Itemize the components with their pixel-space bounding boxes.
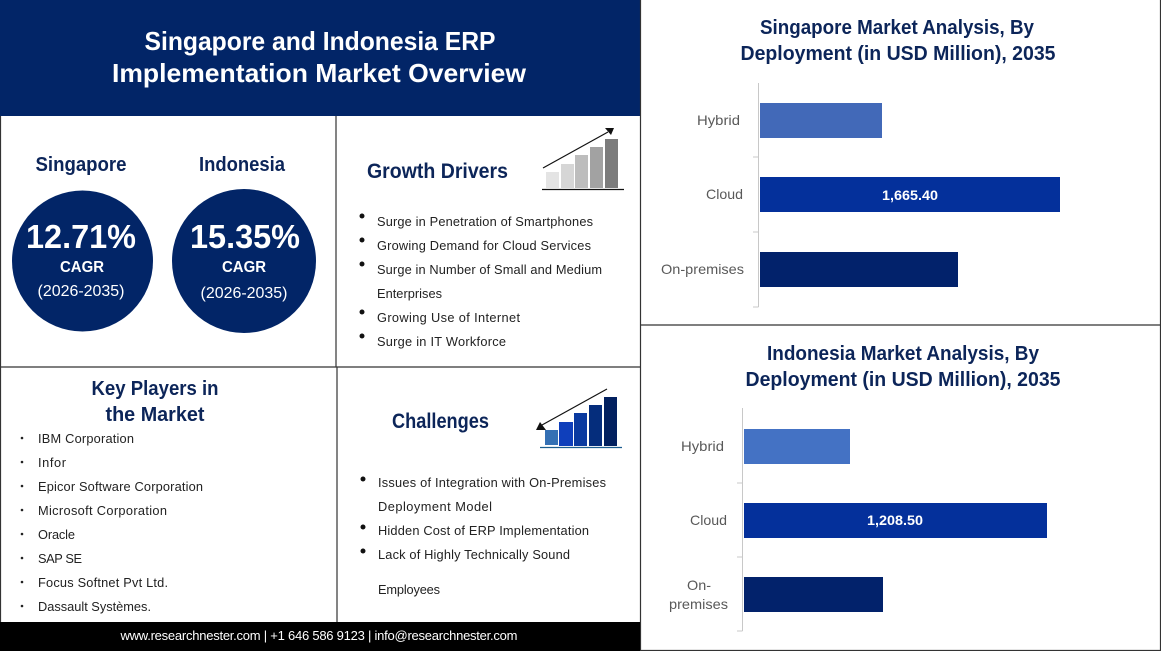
title banner: Implementation Market Overview — [112, 58, 527, 88]
list: challenges: Employees — [378, 582, 440, 597]
bar: On-premises — [669, 577, 883, 612]
list: growth drivers: Surge in IT Workforce — [377, 334, 506, 349]
footer contact bar: www.researchnester.com | +1 646 586 9123 | info@researchnester.com — [120, 628, 518, 643]
list: growth drivers: Surge in Penetration of Smartphones — [377, 214, 593, 229]
circle: Indonesia CAGR: (2026-2035) — [200, 285, 288, 302]
panel: challenges — [360, 389, 622, 597]
bar: Cloud — [706, 177, 1060, 212]
chart title: Deployment (in USD Million), 2035 — [746, 369, 1060, 391]
list: growth drivers — [360, 214, 602, 349]
heading: Growth Drivers: Growth Drivers — [367, 160, 508, 183]
heading: Key Players: the Market — [106, 404, 205, 426]
list: growth drivers: Growing Use of Internet — [377, 310, 520, 325]
list: growth drivers: Enterprises — [377, 286, 442, 301]
bar: On-premises: On-premises — [661, 261, 744, 277]
chart title: Indonesia Market Analysis, By — [767, 343, 1040, 365]
list: growth drivers: Surge in Number of Small and Medium — [377, 262, 602, 277]
heading: Singapore: Singapore — [36, 154, 126, 176]
title banner: Singapore and Indonesia ERP — [144, 26, 496, 56]
icon: declining chart — [536, 389, 622, 448]
panel: growth drivers — [360, 128, 624, 349]
list: key players: Focus Softnet Pvt Ltd. — [38, 575, 168, 590]
list: key players: SAP SE — [38, 551, 82, 566]
list: key players: Dassault Systèmes. — [38, 599, 151, 614]
bar: On-premises — [661, 252, 958, 287]
chart title — [740, 17, 1056, 65]
list: key players: Epicor Software Corporation — [38, 479, 203, 494]
heading: Key Players — [92, 378, 218, 426]
bar: Cloud: 1,665.40 — [882, 187, 938, 203]
bar chart — [669, 408, 1047, 631]
panel: Indonesia chart — [669, 343, 1060, 631]
list: challenges: Lack of Highly Technically Sound — [378, 547, 570, 562]
bar: Cloud: Cloud — [706, 186, 743, 202]
footer contact bar — [0, 622, 640, 651]
bar: Cloud — [690, 503, 1047, 538]
heading: Challenges: Challenges — [392, 410, 489, 433]
list: challenges: Hidden Cost of ERP Implementation — [378, 523, 589, 538]
bar: Cloud: 1,208.50 — [867, 512, 923, 528]
circle: Indonesia CAGR — [172, 189, 316, 333]
list: key players: Microsoft Corporation — [38, 503, 167, 518]
circle: Singapore CAGR: (2026-2035) — [38, 283, 124, 300]
list: key players: IBM Corporation — [38, 431, 134, 446]
list: key players: Infor — [38, 455, 67, 470]
bar: Hybrid — [681, 429, 850, 464]
panel: CAGR — [12, 154, 316, 333]
list: challenges: Deployment Model — [378, 499, 492, 514]
title banner — [0, 0, 640, 116]
list: key players — [21, 431, 203, 614]
chart title: Singapore Market Analysis, By — [760, 17, 1035, 39]
bar: On-premises: premises — [669, 596, 728, 612]
bar: Cloud: Cloud — [690, 512, 727, 528]
circle: Singapore CAGR: CAGR — [60, 259, 104, 276]
list: challenges — [360, 475, 606, 597]
panel: Singapore chart — [661, 17, 1060, 307]
chart title: Deployment (in USD Million), 2035 — [740, 43, 1056, 65]
bar chart — [661, 83, 1060, 307]
circle: Singapore CAGR: 12.71% — [26, 218, 136, 255]
panel: key players — [21, 378, 219, 614]
heading: Key Players: Key Players in — [92, 378, 218, 400]
bar: On-premises: On- — [687, 577, 711, 593]
chart title — [746, 343, 1060, 391]
circle: Singapore CAGR — [12, 190, 153, 332]
bar: Hybrid: Hybrid — [681, 438, 724, 454]
list: challenges: Issues of Integration with On-Premises — [378, 475, 606, 490]
list: growth drivers: Growing Demand for Cloud Services — [377, 238, 591, 253]
circle: Indonesia CAGR: 15.35% — [190, 218, 300, 255]
bar: Hybrid — [697, 103, 882, 138]
heading: Indonesia: Indonesia — [199, 154, 286, 176]
list: key players: Oracle — [38, 527, 75, 542]
icon: growth chart — [542, 128, 624, 190]
circle: Indonesia CAGR: CAGR — [222, 259, 266, 276]
bar: Hybrid: Hybrid — [697, 112, 740, 128]
